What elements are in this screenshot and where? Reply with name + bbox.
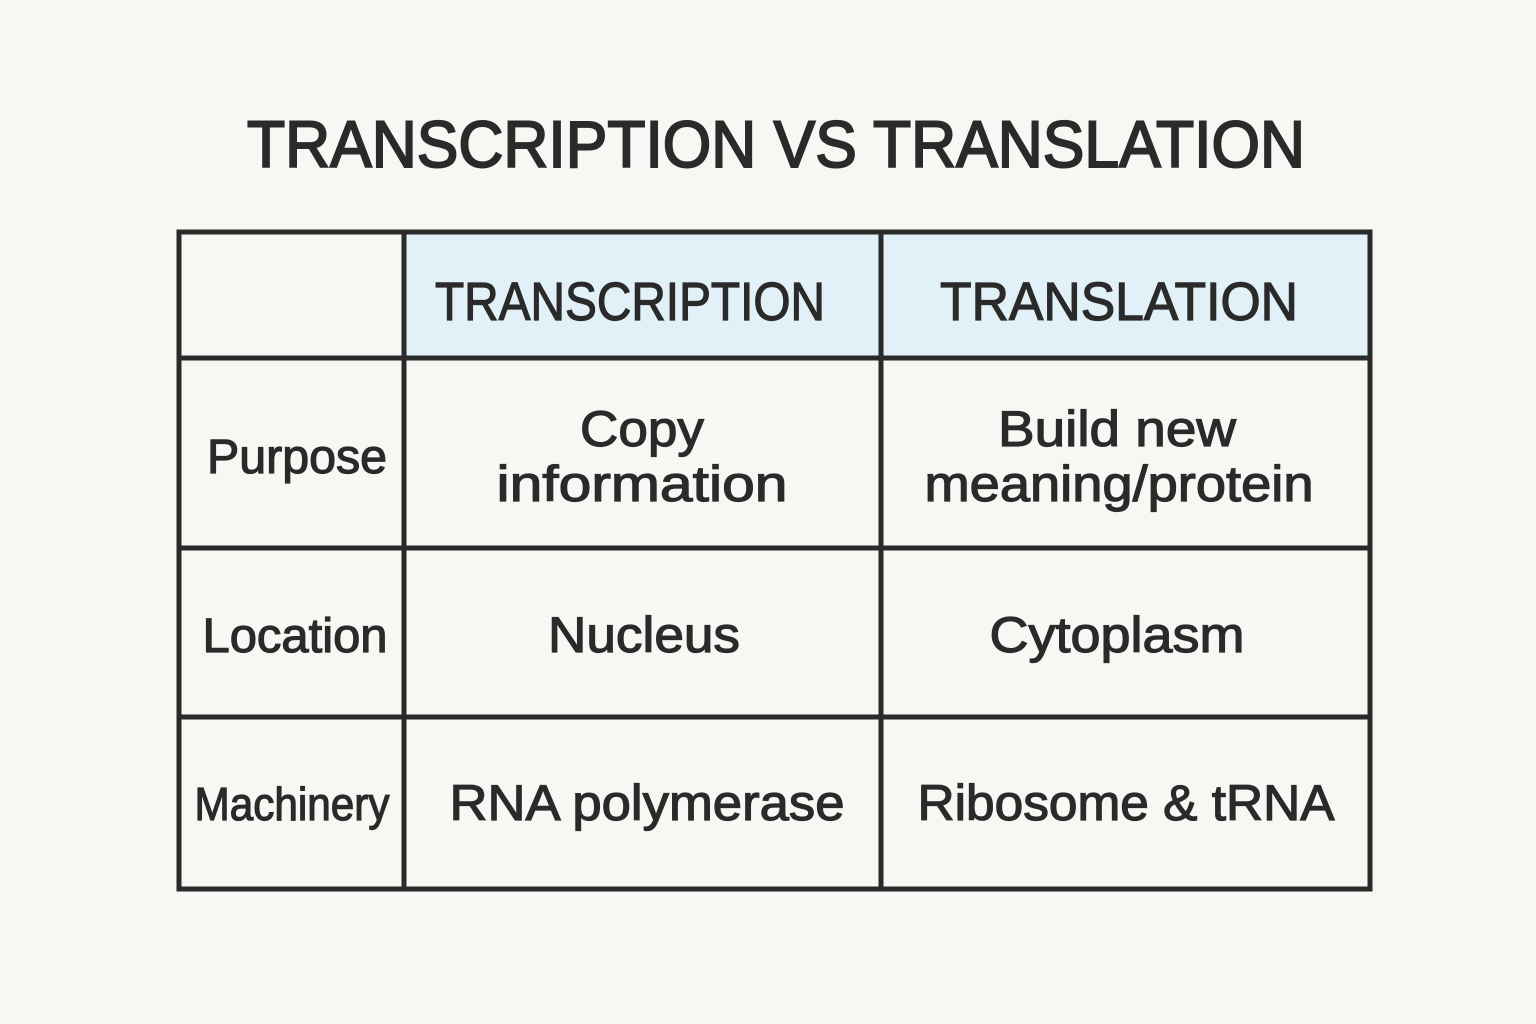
- table: [179, 232, 1370, 889]
- header: translation: TRANSLATION: [940, 272, 1298, 332]
- cell: ribosome & trna: Ribosome & tRNA: [918, 775, 1335, 831]
- title: TRANSCRIPTION VS TRANSLATION: [247, 107, 1305, 181]
- cell: build new meaning/protein: Build new: [998, 401, 1237, 457]
- row label: purpose: Purpose: [207, 431, 387, 484]
- row label: machinery: Machinery: [194, 778, 390, 830]
- table: information: [496, 456, 788, 512]
- table: meaning/protein: [924, 456, 1314, 512]
- cell: copy information: Copy: [580, 401, 704, 457]
- header: transcription: TRANSCRIPTION: [435, 272, 825, 332]
- cell: cytoplasm: Cytoplasm: [990, 607, 1244, 663]
- cell: rna polymerase: RNA polymerase: [450, 775, 844, 831]
- row label: location: Location: [202, 610, 388, 663]
- header fill: [404, 232, 1370, 358]
- cell: nucleus: Nucleus: [548, 607, 740, 663]
